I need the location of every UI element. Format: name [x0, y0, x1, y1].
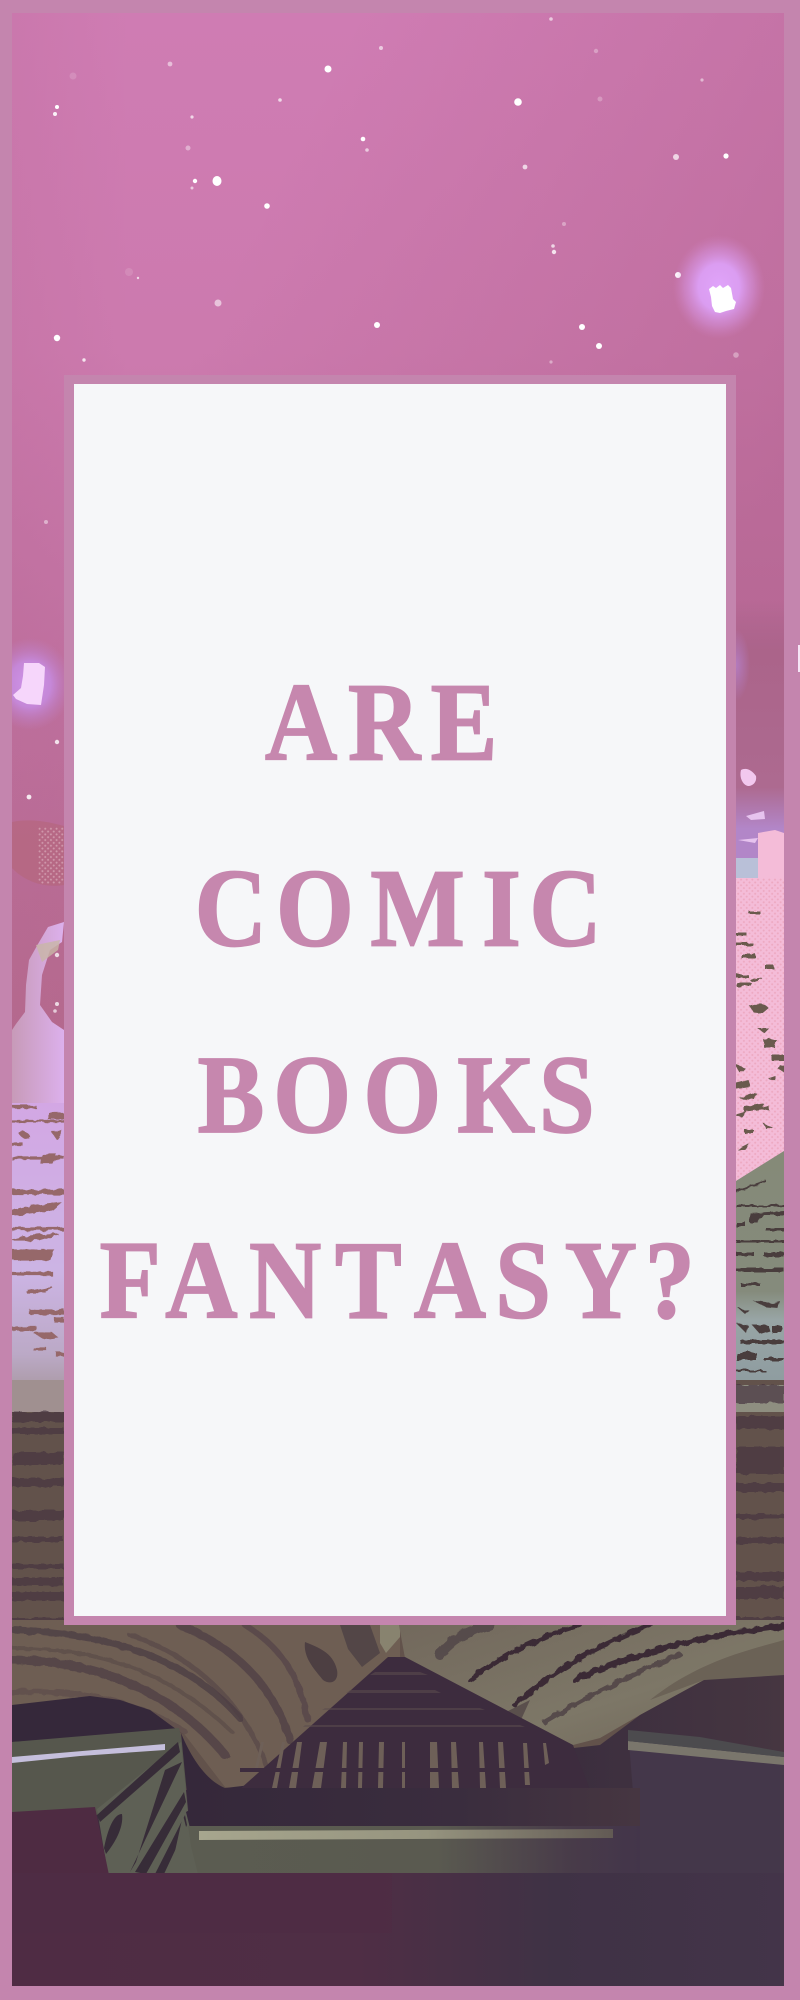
dark hill left	[12, 1696, 180, 1742]
title line: fantasy: FANTASY?	[100, 1219, 695, 1342]
glowing lantern left	[12, 643, 64, 726]
central panel	[64, 375, 736, 1625]
glowing lantern top right	[676, 240, 761, 334]
white glint at right edge	[798, 645, 800, 672]
base fill under lower book	[96, 1790, 188, 1858]
brown striped book edge	[12, 1380, 784, 1800]
stars	[27, 17, 739, 1013]
light strip on lower cover	[190, 1826, 640, 1873]
maroon block left	[12, 1807, 109, 1875]
panel background	[74, 384, 726, 1616]
title line: books: BOOKS	[198, 1033, 595, 1156]
glow right of panel	[736, 635, 748, 695]
dark book cover floor	[12, 1873, 784, 1986]
left book arch with brush strokes	[12, 1620, 400, 1790]
starry pink sky	[12, 13, 784, 1030]
maroon block lower	[12, 1873, 392, 1933]
right page clouds and moon	[738, 769, 765, 843]
diagonal book edge over band	[175, 1818, 186, 1850]
dark floor of shelf	[186, 1788, 640, 1828]
right mauve sky	[736, 632, 784, 858]
grey-green book cover left	[12, 1728, 198, 1874]
right book arch with brush strokes	[398, 1620, 784, 1745]
panel border	[64, 375, 736, 1625]
pyramid	[239, 1657, 590, 1790]
open book page left	[12, 1103, 64, 1410]
title line: comic: COMIC	[195, 847, 602, 970]
title	[100, 661, 695, 1342]
swan figure left	[12, 922, 64, 1110]
hazy band left	[12, 820, 64, 886]
right book slab	[628, 1730, 784, 1880]
title line: are: ARE	[265, 661, 497, 784]
open book page right pink	[736, 830, 784, 1181]
right page grey-green lower	[736, 1151, 784, 1385]
dark shelf under pyramid	[181, 1675, 784, 1790]
